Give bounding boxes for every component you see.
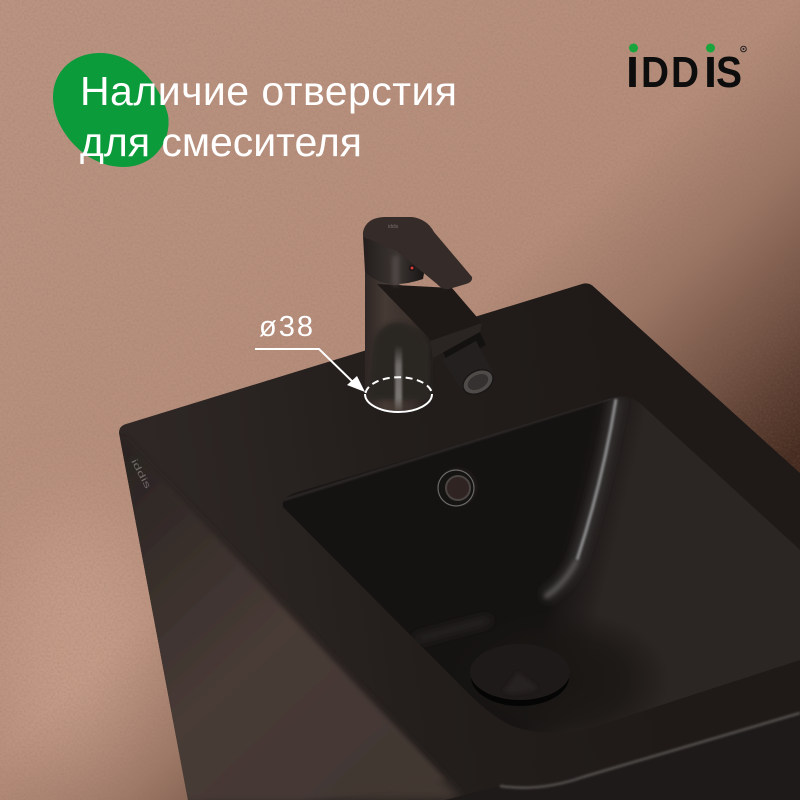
title: Наличие отверстия — [80, 68, 457, 114]
cap — [363, 236, 426, 284]
leader arrow — [255, 349, 357, 386]
diameter marker — [255, 311, 432, 412]
basin — [280, 390, 800, 750]
red indicator — [409, 265, 415, 271]
faucet — [363, 217, 497, 412]
spout — [377, 284, 482, 341]
lever handle — [363, 217, 472, 289]
front rim — [446, 796, 463, 800]
dashed back of opening — [366, 377, 432, 393]
logo: S — [716, 48, 742, 97]
title: для смесителя — [80, 119, 362, 165]
diameter label: ø38 — [259, 311, 313, 343]
green blob — [53, 53, 169, 167]
logo: I — [704, 48, 717, 97]
bidet — [119, 283, 800, 800]
logo: D — [671, 48, 699, 97]
faucet body — [365, 268, 432, 412]
logo: D — [641, 48, 669, 97]
faucet glint — [395, 345, 402, 411]
logo — [626, 44, 746, 97]
bidet front face — [119, 436, 462, 800]
solid front of opening — [365, 394, 432, 412]
highlight on basin corner — [577, 399, 616, 560]
aerator — [440, 328, 497, 399]
drain cap — [470, 644, 570, 706]
overflow ring — [438, 467, 478, 507]
faucet: iddis — [388, 224, 399, 230]
logo: I — [626, 48, 639, 97]
logo mark on bidet: iddis — [129, 457, 153, 491]
title — [80, 68, 457, 165]
bidet deck — [119, 283, 800, 800]
